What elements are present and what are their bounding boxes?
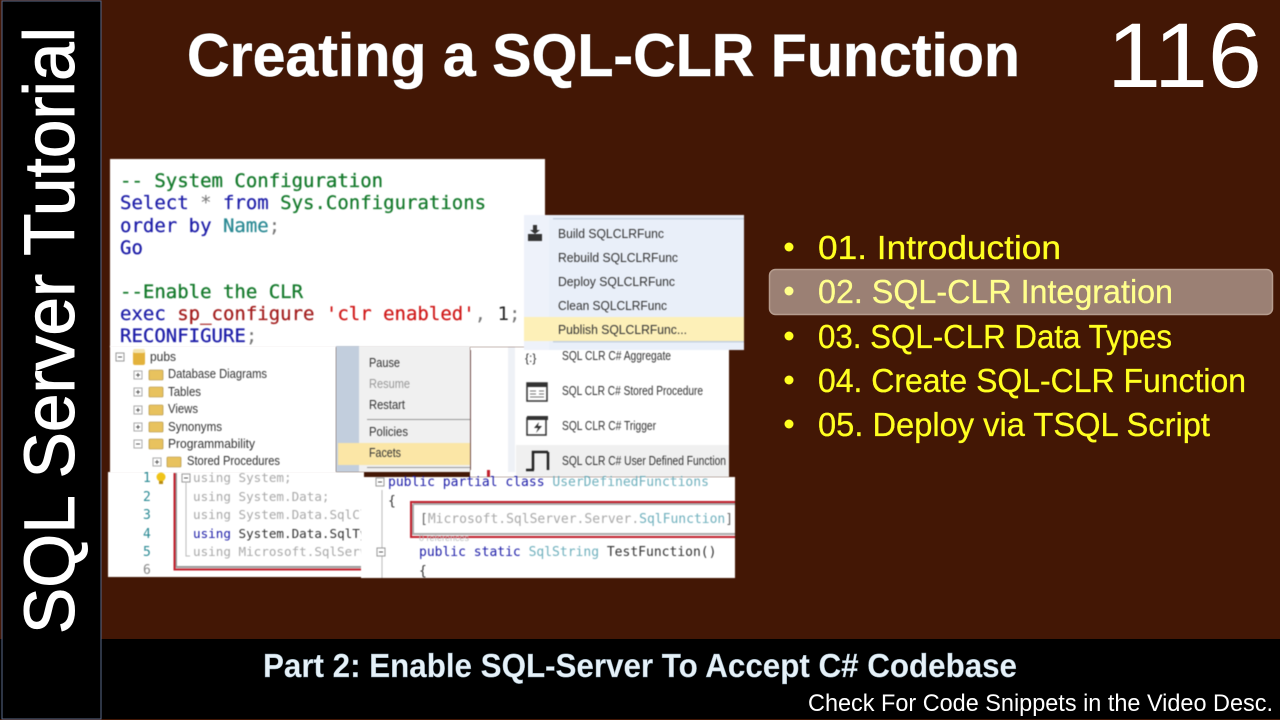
tree rows: Stored Procedures: [187, 454, 280, 468]
sidebar: [2, 1, 101, 719]
panel: template list: SQL CLR C# Stored Procedure: [562, 384, 703, 398]
tree rows: Tables: [168, 385, 201, 399]
panel: template list: SQL CLR C# Trigger: [562, 419, 656, 433]
highlight: current section: [770, 270, 1272, 314]
panel: T-SQL code: exec sp_configure 'clr enabled', 1;: [120, 303, 520, 325]
panel: C# function code: public partial class UserDefinedFunctions: [388, 475, 709, 490]
panel: C# function code: 0 references: [419, 533, 470, 543]
panel: T-SQL code: RECONFIGURE;: [120, 325, 257, 347]
tree rows: [134, 367, 280, 468]
tree rows: Synonyms: [168, 420, 222, 434]
panel: T-SQL code: --Enable the CLR: [120, 281, 304, 303]
panel: T-SQL code: Select * from Sys.Configurations: [120, 192, 486, 214]
panel: context menu: Facets: [369, 446, 401, 460]
panel: C# function code: {: [419, 564, 427, 579]
icon: user defined function: [526, 452, 548, 470]
sidebar title: SQL Server Tutorial: [11, 27, 90, 634]
panel: object explorer: pubs: [150, 350, 176, 364]
panel: using statements: [108, 470, 443, 578]
agenda list: [770, 229, 1272, 443]
panel: template list: [470, 347, 729, 477]
agenda list: 05. Deploy via TSQL Script: [818, 406, 1210, 443]
icon: aggregate: {:}: [525, 351, 536, 365]
icon: build: [528, 225, 542, 241]
panel: using statements: 2: [143, 490, 151, 505]
panel: using statements: 5: [143, 545, 151, 560]
tree rows: Views: [168, 402, 198, 416]
panel: using statements: using System.Data.SqlClient;: [193, 507, 405, 522]
video description note: Check For Code Snippets in the Video Desc.: [808, 690, 1273, 717]
bottom banner: [0, 639, 1280, 719]
panel: using statements: 1: [143, 471, 151, 486]
panel: using statements: using System.Data;: [193, 489, 329, 504]
panel: build menu: Clean SQLCLRFunc: [558, 299, 667, 313]
panel: build menu: [524, 215, 744, 350]
callout: SqlFunction attribute: [Microsoft.SqlServer.Server.SqlFunction]: [420, 512, 733, 527]
panel: context menu: Pause: [369, 356, 400, 370]
panel: using statements: using System.Data.SqlTypes;: [193, 526, 398, 541]
panel: using statements: 3: [143, 508, 151, 523]
panel: T-SQL code: order by Name;: [120, 215, 280, 237]
panel: T-SQL code: [110, 159, 545, 347]
agenda list: 01. Introduction: [818, 229, 1061, 266]
tree rows: Programmability: [168, 437, 256, 451]
agenda list: 03. SQL-CLR Data Types: [818, 318, 1172, 355]
agenda list: 04. Create SQL-CLR Function: [818, 362, 1246, 399]
tree rows: Database Diagrams: [168, 367, 267, 381]
panel: context menu: Restart: [369, 398, 405, 412]
panel: context menu: Policies: [369, 425, 408, 439]
title: Creating a SQL-CLR Function: [187, 22, 1020, 89]
panel: T-SQL code: Go: [120, 237, 143, 259]
callout: SqlFunction attribute: [411, 502, 735, 537]
panel: C# function code: [361, 475, 735, 579]
icon: stored procedure: [527, 383, 547, 401]
panel: using statements: using Microsoft.SqlServer.Server;: [193, 544, 443, 559]
panel: template list: SQL CLR C# Aggregate: [562, 349, 671, 363]
panel: using statements: using System;: [193, 470, 292, 485]
panel: C# function code: {: [388, 494, 396, 509]
panel: build menu: Rebuild SQLCLRFunc: [558, 251, 678, 265]
icon: trigger: [527, 416, 548, 435]
agenda list: 02. SQL-CLR Integration: [818, 273, 1173, 310]
panel: using statements: 6: [143, 563, 151, 578]
panel: build menu: Deploy SQLCLRFunc: [558, 275, 675, 289]
episode number: 116: [1107, 5, 1262, 107]
panel: context menu: [336, 346, 471, 472]
panel: context menu: Resume: [369, 377, 410, 391]
panel: C# function code: public static SqlString TestFunction(): [419, 545, 716, 560]
icon: database: [133, 349, 145, 365]
panel: object explorer: [110, 346, 336, 473]
panel: template list: SQL CLR C# User Defined Function: [562, 454, 726, 468]
panel: T-SQL code: -- System Configuration: [120, 170, 383, 192]
icon: lightbulb: [156, 472, 166, 484]
panel: build menu: Build SQLCLRFunc: [558, 227, 664, 241]
panel: using statements: 4: [143, 527, 151, 542]
panel: build menu: Publish SQLCLRFunc...: [558, 323, 687, 337]
subtitle: Part 2: Enable SQL-Server To Accept C# Codebase: [263, 647, 1017, 684]
